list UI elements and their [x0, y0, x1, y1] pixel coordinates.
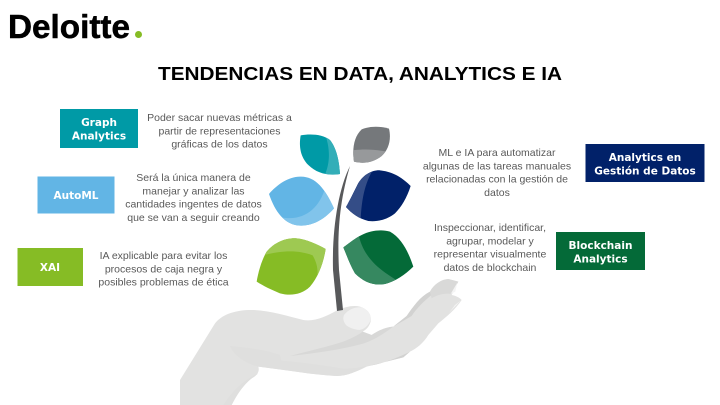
illustration: hand — [180, 279, 462, 405]
leaf: dark green — [343, 230, 414, 284]
box: AutoML — [38, 176, 114, 214]
text: XAI description: procesos de caja negra y — [105, 263, 223, 275]
title: TENDENCIAS EN DATA, ANALYTICS E IA — [158, 63, 562, 84]
box: Blockchain Analytics: Blockchain — [569, 240, 632, 252]
box: Blockchain Analytics — [556, 232, 645, 270]
box: Analytics en Gestión de Datos: Gestión de Datos — [594, 166, 696, 178]
Deloitte logo: Deloitte — [8, 8, 130, 45]
text: Blockchain Analytics description: datos de blockchain — [444, 262, 537, 274]
leaf: light blue — [269, 176, 334, 226]
box: AutoML: AutoML — [54, 190, 99, 202]
box: XAI: XAI — [40, 262, 60, 274]
text: XAI description: posibles problemas de ética — [98, 277, 229, 289]
text: Analytics en Gestión de Datos description: algunas de las tareas manuales — [423, 160, 571, 172]
text: Graph Analytics description: Poder sacar nuevas métricas a — [147, 112, 292, 124]
box: Graph Analytics: Graph — [81, 117, 117, 129]
box: Blockchain Analytics: Analytics — [573, 254, 628, 266]
text: AutoML description: manejar y analizar las — [142, 185, 245, 197]
leaf: teal — [300, 134, 340, 175]
text: Blockchain Analytics description: representar visualmente — [434, 249, 546, 261]
text: AutoML description: Será la única manera de — [136, 172, 251, 184]
illustration: stem — [333, 166, 350, 311]
text: Blockchain Analytics description: Inspeccionar, identificar, — [434, 222, 546, 234]
box: Analytics en Gestión de Datos: Analytics en — [609, 152, 681, 164]
leaf: gray — [353, 126, 390, 163]
text: Graph Analytics description: partir de representaciones — [158, 125, 280, 137]
leaf: navy — [346, 170, 411, 222]
text: Analytics en Gestión de Datos description: ML e IA para automatizar — [439, 147, 556, 159]
box: Graph Analytics: Analytics — [72, 130, 126, 142]
text: Analytics en Gestión de Datos description: relacionadas con la gestión de — [426, 174, 568, 186]
text: AutoML description: que se van a seguir creando — [127, 212, 260, 224]
text: XAI description: IA explicable para evitar los — [100, 250, 227, 262]
box: Analytics en Gestión de Datos — [586, 144, 704, 182]
box: XAI — [18, 248, 83, 286]
box: Graph Analytics — [60, 109, 138, 148]
text: Graph Analytics description: gráficas de los datos — [171, 139, 268, 151]
text: AutoML description: cantidades ingentes de datos — [125, 199, 262, 211]
text: Analytics en Gestión de Datos description: datos — [484, 187, 510, 199]
leaf: light green — [256, 238, 326, 295]
text: Blockchain Analytics description: agrupar, modelar y — [446, 235, 535, 247]
